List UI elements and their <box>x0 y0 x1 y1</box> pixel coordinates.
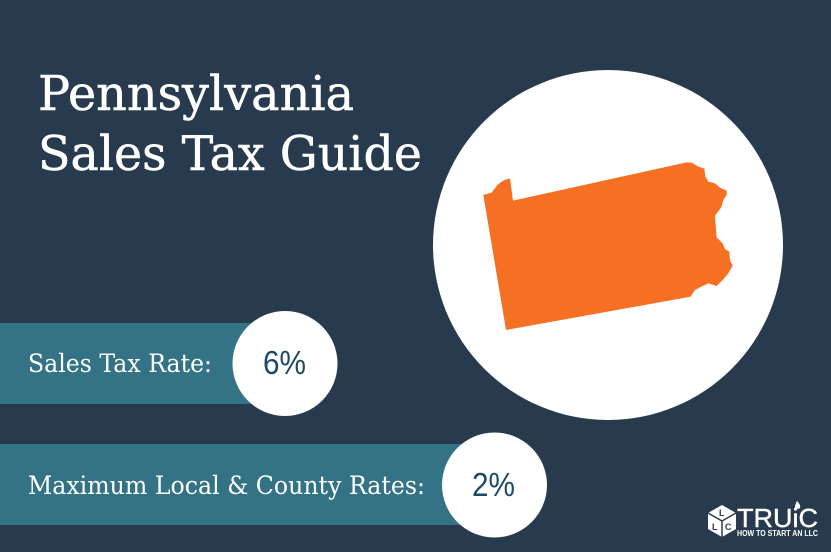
title <box>38 66 422 182</box>
logo: TRUiC How to Start an LLC <box>708 501 818 538</box>
value: 6%: 6% <box>263 344 306 381</box>
label: sales tax rate: Sales Tax Rate: <box>28 349 212 378</box>
icon: Pennsylvania state outline <box>483 162 733 330</box>
title: Pennsylvania <box>38 66 354 122</box>
icon: flame over i <box>795 501 800 509</box>
icon: LLC cube: C <box>725 522 732 532</box>
title: Sales Tax Guide <box>38 126 422 182</box>
icon: LLC cube: L <box>712 522 718 532</box>
panel: maximum local and county rates <box>0 432 547 538</box>
map circle with Pennsylvania state shape <box>433 70 783 420</box>
label: maximum local and county rates: Maximum Local & County Rates: <box>28 471 425 500</box>
panel: sales tax rate <box>0 311 338 416</box>
icon: LLC cube: L <box>719 508 725 518</box>
tagline: HOW TO START AN LLC <box>737 529 818 538</box>
icon: LLC cube <box>708 505 736 537</box>
value: 2%: 2% <box>472 466 515 503</box>
wordmark: TRUiC <box>737 503 818 533</box>
